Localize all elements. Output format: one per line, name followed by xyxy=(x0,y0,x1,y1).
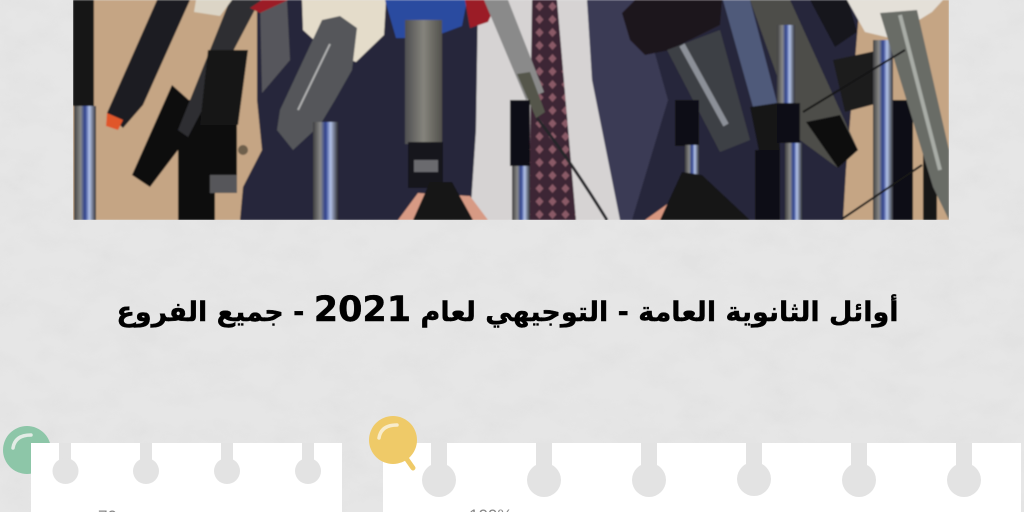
title: أوائل الثانوية العامة - التوجيهي لعام 2021 - جميع الفروع xyxy=(116,290,899,330)
red foam xyxy=(464,0,492,29)
grey jacket highlight xyxy=(260,0,290,93)
black central stand xyxy=(178,100,237,220)
left silver stand xyxy=(74,106,96,220)
photo backdrop wall xyxy=(73,0,949,220)
right microphone group xyxy=(622,0,722,55)
shirt xyxy=(470,0,622,220)
hands xyxy=(398,193,488,220)
thin cables xyxy=(803,50,922,219)
hand lower right xyxy=(644,203,668,220)
cream foam microphone xyxy=(302,0,386,62)
left dark stand top xyxy=(73,0,94,106)
dark microphone centre left xyxy=(178,0,260,137)
black microphone with orange tip xyxy=(107,0,190,128)
blue foam microphone xyxy=(385,0,467,38)
black microphone lower xyxy=(132,84,190,188)
right silver microphone xyxy=(880,10,949,220)
silver stand centre xyxy=(313,122,338,220)
lapel xyxy=(587,0,668,220)
silver microphone xyxy=(484,0,544,100)
suit jacket xyxy=(240,0,860,220)
right cream foam xyxy=(847,0,943,38)
microphone base xyxy=(413,182,473,220)
microphone clip and stand xyxy=(517,72,545,118)
tie xyxy=(529,0,576,220)
cable xyxy=(537,118,607,220)
right silver stands xyxy=(873,40,893,220)
photo: microphones at a press conference xyxy=(73,0,949,220)
